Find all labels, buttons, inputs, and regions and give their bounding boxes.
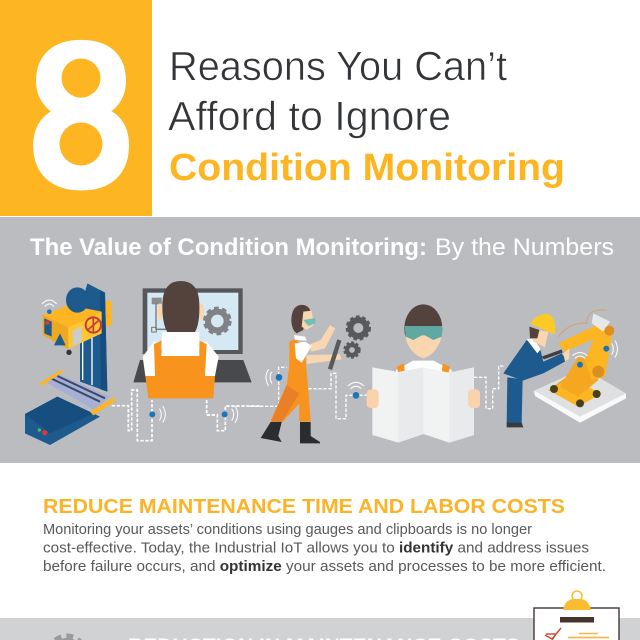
wifi icon: [42, 300, 57, 314]
title: [168, 43, 565, 189]
body text: cost-effective. Today, the Industrial IoT allows you to identify and address issues: [43, 540, 589, 556]
body text: Monitoring your assets’ conditions using gauges and clipboards is no longer: [43, 522, 532, 538]
panel heading: The Value of Condition Monitoring:: [30, 234, 427, 261]
dashed network lines: [112, 390, 260, 441]
title: Condition Monitoring: [169, 147, 565, 189]
robot arm: [533, 310, 626, 423]
section heading: REDUCE MAINTENANCE TIME AND LABOR COSTS: [43, 496, 565, 518]
panel heading: [30, 234, 614, 261]
engineer with map: [367, 304, 480, 443]
gear icon: [49, 636, 85, 640]
sensor icons: [266, 369, 364, 399]
sensor icons: [149, 406, 238, 423]
number 8: 8: [32, 4, 130, 227]
title: Reasons You Can’t: [169, 43, 508, 89]
illustration: right group: [250, 304, 626, 443]
dashed network lines: [250, 366, 505, 419]
worker at monitor: [133, 281, 252, 398]
body text: [43, 522, 606, 575]
sensor icons on robot: [573, 341, 617, 368]
milling machine: [25, 283, 116, 445]
panel heading: By the Numbers: [435, 234, 614, 261]
icon: clipboard: [534, 591, 619, 640]
yellow number panel: [0, 0, 152, 227]
title: Afford to Ignore: [168, 93, 451, 139]
businessman: [503, 314, 569, 427]
panel: by the numbers: [0, 217, 640, 463]
body text: before failure occurs, and optimize your assets and processes to be more efficient.: [43, 559, 606, 575]
panel: maintenance costs: [0, 618, 640, 640]
worker with wrench: [261, 305, 370, 443]
illustration: left group: [25, 281, 260, 445]
